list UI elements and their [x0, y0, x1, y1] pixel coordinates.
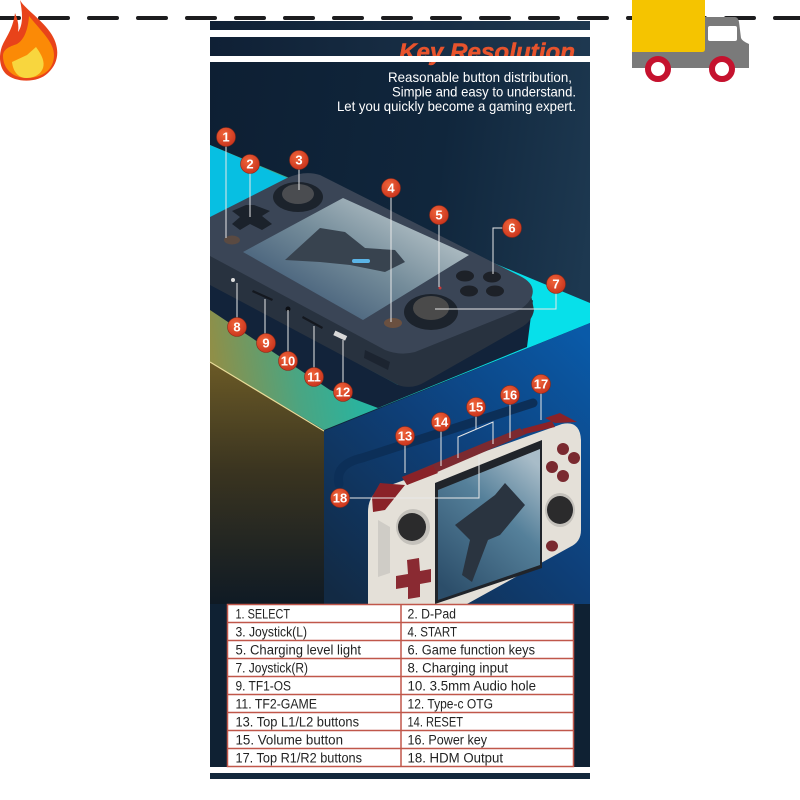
- marker numbers: 18: [333, 490, 347, 506]
- marker numbers: 7: [552, 276, 560, 292]
- title descender: Key Resolution: [399, 39, 575, 66]
- table text: 16. Power key: [408, 732, 487, 748]
- marker numbers: [222, 130, 560, 506]
- table text: 13. Top L1/L2 buttons: [236, 714, 359, 730]
- front face: [210, 250, 534, 387]
- table text: [236, 606, 536, 766]
- table text: 6. Game function keys: [408, 642, 535, 658]
- ship glow: [352, 259, 370, 263]
- numbered markers: [216, 128, 566, 508]
- ports on front edge: [231, 278, 390, 370]
- subtitle text: Let you quickly become a gaming expert.: [337, 98, 576, 114]
- title: Key Resolution: [399, 39, 575, 66]
- marker numbers: 11: [307, 370, 321, 384]
- marker numbers: 3: [295, 152, 303, 168]
- lower dark strip behind table: [210, 604, 590, 767]
- table text: 4. START: [408, 624, 457, 640]
- face buttons: [456, 270, 504, 296]
- legend table: [227, 604, 574, 767]
- bottom dark band: [210, 773, 590, 779]
- table background: [228, 604, 574, 766]
- cab window: [708, 26, 737, 41]
- device reflection: [210, 283, 533, 408]
- callout lines: [226, 146, 556, 498]
- table text: 12. Type-c OTG: [408, 696, 493, 712]
- table grid: [227, 604, 574, 767]
- screen: [435, 440, 542, 604]
- cargo box: [632, 0, 705, 52]
- handheld console, white: [368, 413, 581, 604]
- marker numbers: 1: [222, 130, 230, 144]
- table text: 17. Top R1/R2 buttons: [236, 750, 362, 766]
- right joystick: [404, 294, 458, 330]
- table text: 11. TF2-GAME: [236, 696, 317, 712]
- ship: [455, 483, 525, 582]
- marker numbers: 15: [469, 400, 483, 414]
- blue face recess: [338, 403, 533, 484]
- table text: 1. SELECT: [236, 606, 290, 622]
- left joystick: [273, 182, 323, 212]
- main panel: [210, 62, 590, 767]
- upper-left cyan wedge: [210, 145, 287, 218]
- left corner: [372, 483, 405, 512]
- marker numbers: 6: [508, 220, 516, 236]
- d-pad: [396, 558, 431, 599]
- table text: 14. RESET: [408, 714, 463, 730]
- marker numbers: 16: [503, 388, 517, 402]
- screen: [243, 198, 469, 320]
- marker numbers: 4: [387, 180, 395, 196]
- icon: flame: [0, 0, 57, 81]
- marker numbers: 9: [262, 336, 270, 350]
- table text: 2. D-Pad: [408, 606, 456, 622]
- subtitle text: [337, 69, 576, 114]
- table text: 15. Volume button: [236, 732, 343, 748]
- marker numbers: 8: [233, 320, 241, 334]
- table text: 10. 3.5mm Audio hole: [408, 678, 536, 694]
- left joystick: [396, 509, 430, 545]
- blue side face: [324, 323, 590, 604]
- marker numbers: 5: [435, 208, 443, 222]
- white strip across title: [210, 56, 590, 62]
- table text: 7. Joystick(R): [236, 660, 308, 676]
- marker numbers: 10: [281, 354, 295, 368]
- right corner: [545, 413, 577, 423]
- body: [368, 423, 581, 604]
- table text: 5. Charging level light: [236, 642, 361, 658]
- top dark band: [210, 21, 590, 30]
- start button: [546, 540, 558, 552]
- select button: [224, 236, 240, 244]
- dashed line: [0, 16, 800, 20]
- screen ship: [285, 228, 405, 272]
- wheels: [648, 59, 732, 79]
- left grip: [378, 520, 390, 577]
- charging light: [438, 286, 442, 290]
- truck cab: [632, 17, 749, 68]
- marker numbers: 12: [336, 384, 350, 400]
- table text: 8. Charging input: [408, 660, 508, 676]
- face buttons: [546, 443, 580, 482]
- subtitle text: Simple and easy to understand.: [392, 84, 576, 100]
- olive side face: [210, 362, 324, 604]
- table text: 3. Joystick(L): [236, 624, 307, 640]
- R buttons: [522, 421, 555, 434]
- start button: [384, 318, 402, 328]
- top face: [210, 173, 533, 354]
- d-pad: [232, 205, 272, 230]
- screen image: [438, 449, 540, 600]
- edge highlight: [210, 362, 324, 431]
- table text: 9. TF1-OS: [236, 678, 291, 694]
- subtitle text: Reasonable button distribution,: [388, 69, 572, 85]
- marker numbers: 17: [534, 376, 548, 392]
- icon: delivery truck: [632, 0, 749, 79]
- marker numbers: 2: [246, 156, 254, 172]
- title band: [210, 37, 590, 56]
- right joystick: [545, 493, 575, 527]
- table text: 18. HDM Output: [408, 750, 503, 766]
- marker numbers: 14: [434, 414, 449, 430]
- handheld console, dark: [210, 173, 534, 387]
- L buttons: [402, 466, 438, 485]
- illustration: table surface: [210, 145, 590, 430]
- marker numbers: 13: [398, 428, 412, 444]
- shoulder strip: [402, 428, 526, 485]
